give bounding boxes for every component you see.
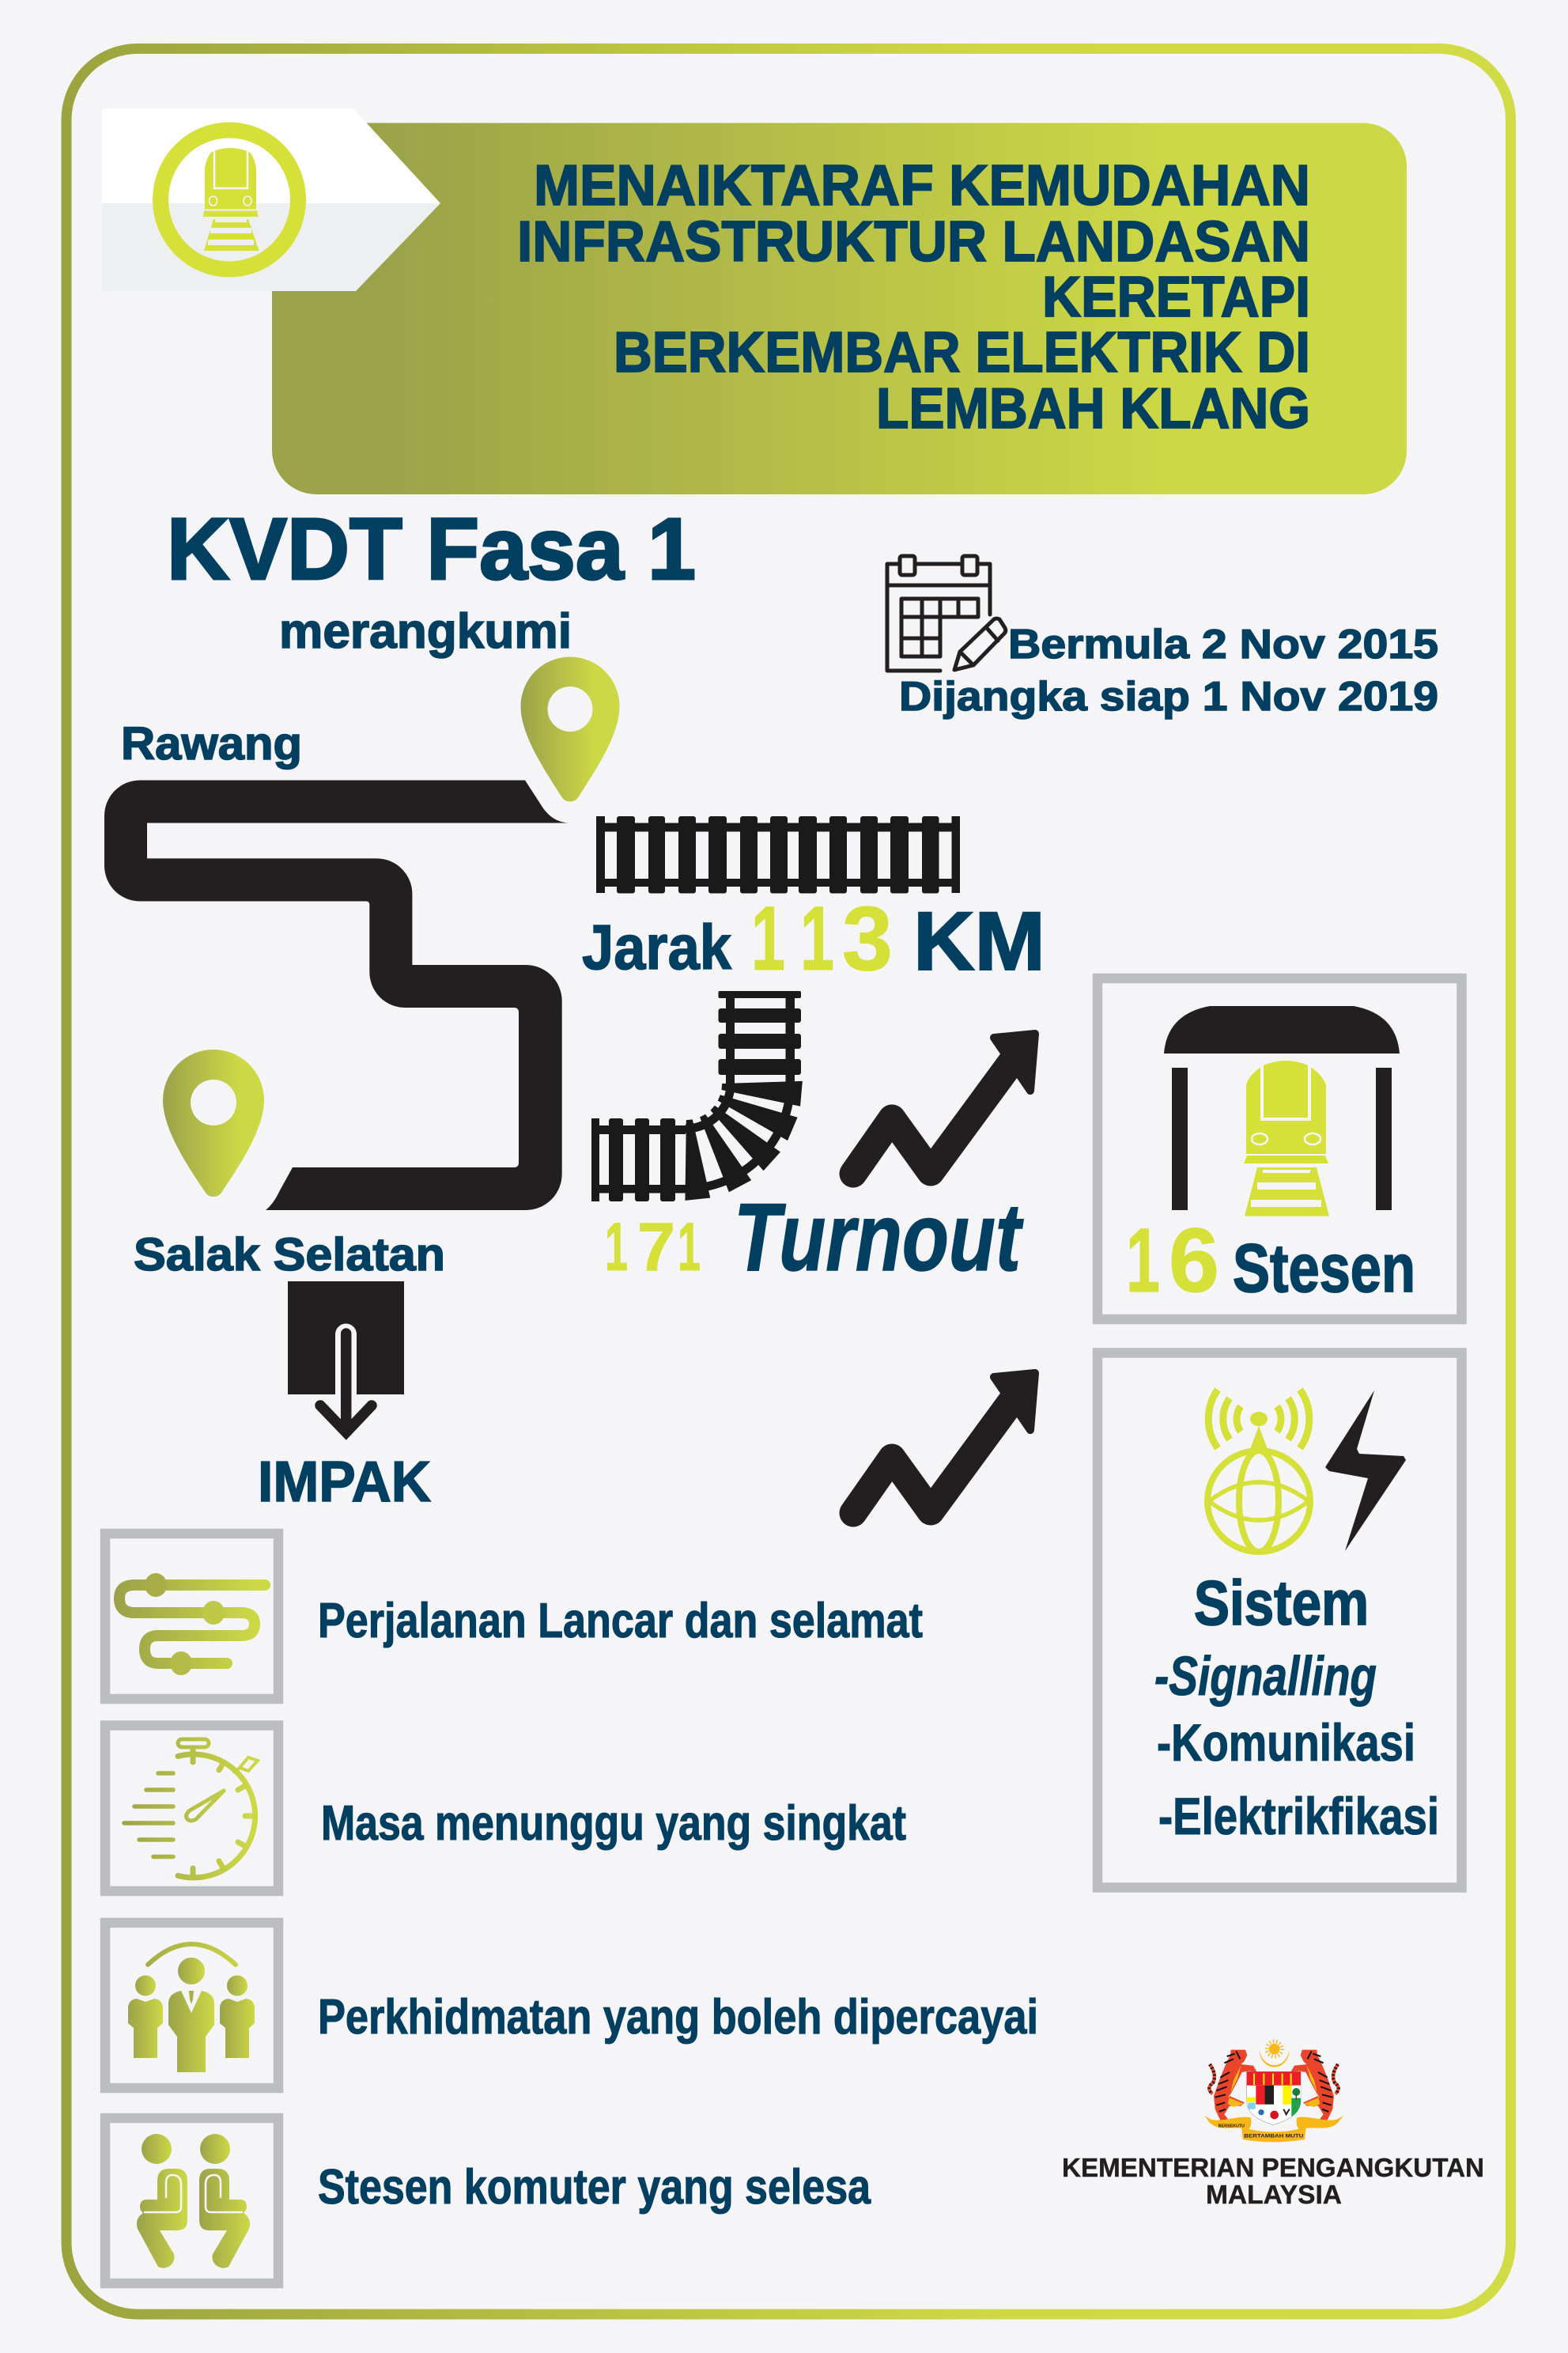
stat: 171 Turnout: 7 — [637, 1209, 675, 1285]
scroll with motto: BERTAMBAH MUTU — [1244, 2134, 1304, 2139]
text: Stesen komuter: Stesen komuter yang selesa — [318, 2160, 871, 2215]
white arrow tag — [102, 109, 440, 291]
panel: impact 1 — [105, 1534, 923, 1699]
stat: 16 Stesen: Stesen — [1233, 1231, 1415, 1307]
list: systems: -Elektrikfikasi — [1158, 1787, 1439, 1845]
icon: turnout curved rail — [591, 991, 803, 1201]
text: Masa menunggu: Masa menunggu yang singkat — [321, 1796, 906, 1851]
dates: Dijangka siap 1 Nov 2019 — [899, 674, 1438, 720]
icon: pin Rawang — [520, 657, 620, 802]
distance: Jarak 113 KM: Jarak — [582, 912, 731, 982]
dates — [899, 622, 1438, 720]
icon: straight rail track — [596, 816, 960, 894]
shield — [1247, 2071, 1301, 2125]
distance: Jarak 113 KM: 1 — [751, 888, 785, 989]
stat: 16 Stesen: 6 — [1169, 1210, 1219, 1311]
list: systems: -Signalling — [1154, 1645, 1377, 1707]
distance: Jarak 113 KM: 3 — [842, 888, 893, 989]
logo: Malaysian coat of arms — [1204, 2041, 1343, 2142]
text: Perkhidmatan: Perkhidmatan yang boleh dipercayai — [318, 1990, 1038, 2045]
list: systems — [1154, 1645, 1439, 1845]
icon: calendar with pencil — [887, 556, 1006, 671]
icon: seated passengers — [137, 2134, 250, 2268]
right tiger — [1291, 2050, 1339, 2120]
panel: impact 3 — [105, 1923, 1038, 2088]
scroll with motto: BERSEKUTU — [1219, 2124, 1245, 2128]
arrow: upward trend 2 — [853, 1373, 1035, 1513]
icon: black box with down arrow — [288, 1281, 404, 1432]
heading: KVDT Fasa 1: KVDT Fasa 1 — [167, 501, 696, 598]
stat: 171 Turnout: Turnout — [734, 1183, 1023, 1291]
scroll with motto — [1204, 2116, 1343, 2142]
icon: stopwatch — [124, 1739, 258, 1878]
list: systems: -Komunikasi — [1157, 1713, 1415, 1772]
header banner — [102, 109, 1407, 494]
panel: stesen — [1098, 978, 1461, 1319]
left tiger — [1209, 2050, 1256, 2120]
icon: service people — [128, 1944, 255, 2072]
title — [517, 154, 1310, 441]
icon: globe antenna — [1207, 1390, 1310, 1552]
title: BERKEMBAR ELEKTRIK DI — [614, 321, 1310, 384]
ministry name: MALAYSIA — [1206, 2180, 1342, 2209]
subheading: merangkumi: merangkumi — [279, 604, 572, 659]
heading: IMPAK: IMPAK — [258, 1451, 431, 1514]
route line — [104, 780, 569, 1210]
title: MENAIKTARAF KEMUDAHAN — [534, 154, 1310, 218]
text: Perjalanan: Perjalanan Lancar dan selamat — [318, 1594, 923, 1648]
crescent and star — [1260, 2041, 1290, 2067]
icon: train in ring — [161, 130, 298, 269]
icon: station shelter with train — [1164, 1006, 1400, 1216]
ministry name: KEMENTERIAN PENGANGKUTAN — [1062, 2153, 1484, 2182]
stat: 171 Turnout: 1 — [678, 1209, 701, 1285]
distance: Jarak 113 KM: KM — [913, 895, 1045, 988]
stat: 171 Turnout — [605, 1183, 1023, 1291]
banner panel — [272, 123, 1407, 494]
distance: Jarak 113 KM — [582, 888, 1045, 989]
icon: lightning bolt — [1325, 1390, 1406, 1551]
panel: impact 4 — [105, 2118, 871, 2283]
dates: Bermula 2 Nov 2015 — [1008, 622, 1438, 668]
panel: sistem — [1098, 1352, 1461, 1887]
title: KERETAPI — [1042, 266, 1310, 329]
label: Salak Selatan: Salak Selatan — [134, 1229, 445, 1281]
ministry name — [1062, 2153, 1484, 2209]
heading: Sistem: Sistem — [1194, 1568, 1369, 1638]
title: INFRASTRUKTUR LANDASAN — [517, 210, 1310, 274]
icon: pin Salak Selatan — [163, 1050, 264, 1197]
stat: 16 Stesen — [1126, 1210, 1415, 1311]
distance: Jarak 113 KM: 1 — [800, 888, 834, 989]
panel: impact 2 — [105, 1726, 906, 1891]
title: LEMBAH KLANG — [876, 377, 1310, 441]
stat: 16 Stesen: 1 — [1126, 1210, 1160, 1311]
stat: 171 Turnout: 1 — [605, 1209, 628, 1285]
label: Rawang: Rawang — [121, 718, 302, 770]
icon: winding road — [119, 1573, 265, 1675]
arrow: upward trend 1 — [853, 1034, 1035, 1174]
